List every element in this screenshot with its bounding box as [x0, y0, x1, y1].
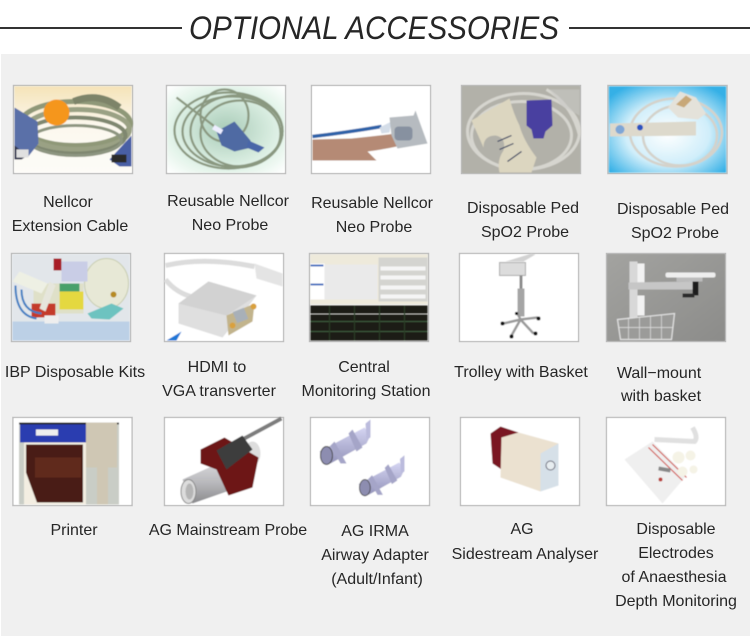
label [311, 195, 434, 236]
label: with basket [620, 388, 702, 405]
photo: trolley [460, 254, 578, 342]
label: VGA transverter [162, 383, 277, 400]
photo: electrodes [606, 418, 726, 506]
label: SpO2 Probe [631, 225, 719, 242]
item: Central Monitoring Station [302, 254, 430, 400]
label [302, 359, 430, 400]
label: Trolley with Basket [454, 364, 588, 381]
item: Disposable Electrodes of Anaesthesia Depth Monitoring [606, 418, 737, 610]
item: Trolley with Basket [454, 254, 588, 381]
label: Electrodes [638, 545, 714, 562]
item: AG IRMA Airway Adapter [310, 418, 430, 588]
label [467, 200, 579, 241]
item: IBP Disposable Kits [5, 254, 145, 381]
photo: sidestream analyser [460, 418, 580, 506]
label [167, 193, 290, 234]
label: Wall−mount [617, 365, 702, 382]
photo: probe on finger [312, 86, 430, 174]
label: Disposable Ped [617, 201, 729, 218]
photo: airway adapters [310, 418, 430, 506]
photo: blue background disposable probe [608, 86, 727, 174]
label: Disposable [636, 521, 716, 538]
label: Depth Monitoring [615, 593, 737, 610]
item: Reusable Nellcor Neo Probe, finger [311, 86, 434, 236]
label: SpO2 Probe [481, 224, 569, 241]
photo: mainstream probe [164, 418, 284, 506]
label: Neo Probe [192, 217, 268, 234]
title: OPTIONAL ACCESSORIES [189, 10, 559, 46]
photo: printer [13, 418, 132, 506]
item: Printer [13, 418, 132, 539]
label: Reusable Nellcor [167, 193, 290, 210]
item: AG Sidestream Analyser [452, 418, 599, 563]
item: Disposable Ped SpO2 Probe, blue [608, 86, 729, 242]
label: Extension Cable [12, 218, 128, 235]
item: Nellcor Extension Cable [12, 86, 132, 235]
label [615, 521, 737, 610]
label [162, 359, 277, 400]
label: HDMI to [188, 359, 246, 376]
label: Monitoring Station [302, 383, 430, 400]
item: Reusable Nellcor Neo Probe [166, 86, 290, 234]
label: Airway Adapter [321, 547, 429, 564]
photo: adapter [164, 254, 284, 342]
label: AG IRMA [341, 523, 409, 540]
label [617, 201, 729, 242]
label: Sidestream Analyser [452, 546, 599, 563]
item: Wall-mount with basket [606, 254, 726, 405]
photo: IBP kit [12, 254, 130, 342]
label [617, 365, 702, 405]
photo: purple disposable probe [462, 86, 580, 174]
label: Disposable Ped [467, 200, 579, 217]
label: Nellcor [43, 194, 94, 211]
label: (Adult/Infant) [331, 571, 423, 588]
label: IBP Disposable Kits [5, 364, 145, 381]
photo: wall mount [606, 254, 726, 342]
item: HDMI to VGA transverter [162, 254, 284, 400]
label: Reusable Nellcor [311, 195, 434, 212]
item: AG Mainstream Probe [149, 418, 307, 539]
label: AG Mainstream Probe [149, 522, 307, 539]
label: of Anaesthesia [622, 569, 727, 586]
photo: monitoring software [310, 254, 428, 342]
photo: extension cable [14, 86, 132, 174]
label [452, 521, 599, 563]
label [321, 523, 429, 588]
photo: neo probe coil [166, 86, 286, 174]
item: Disposable Ped SpO2 Probe, purple [462, 86, 580, 241]
label: Central [338, 359, 390, 376]
label: AG [510, 521, 534, 538]
label [12, 194, 128, 235]
label: Printer [50, 522, 98, 539]
label: Neo Probe [336, 219, 412, 236]
